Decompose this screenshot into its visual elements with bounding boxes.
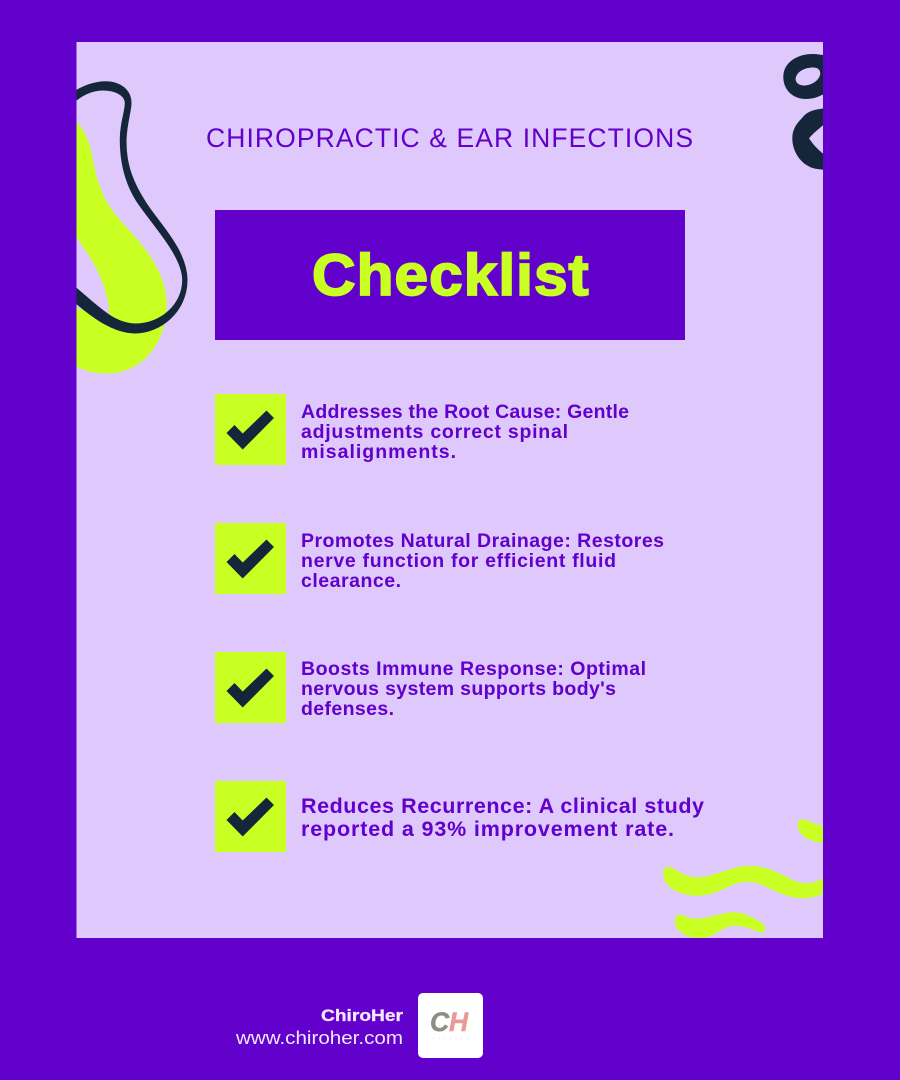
checklist item 2: clearance. — [301, 570, 401, 592]
checklist item 2: nerve function for efficient fluid — [301, 550, 616, 572]
checklist item 4: Reduces Recurrence: A clinical study — [301, 794, 704, 818]
logo: ....... — [433, 1034, 468, 1040]
logo: H — [449, 1007, 469, 1037]
checklist item 3: nervous system supports body's — [301, 678, 616, 700]
icon: check box — [215, 394, 286, 465]
checklist item 4: reported a 93% improvement rate. — [301, 817, 674, 841]
checklist item 3 — [215, 652, 646, 723]
decoration: dark rings top right — [783, 54, 823, 170]
checklist item 3: Boosts Immune Response: Optimal — [301, 658, 646, 680]
logo — [418, 993, 483, 1058]
checklist item 1 — [215, 394, 629, 465]
checklist item 4 — [215, 781, 704, 852]
panel: checklist card — [76, 42, 823, 938]
icon: check box — [215, 652, 286, 723]
checklist item 1: adjustments correct spinal — [301, 421, 568, 443]
checklist item 2 — [215, 523, 664, 594]
icon: check box — [215, 523, 286, 594]
title banner: Checklist — [312, 242, 589, 308]
checklist item 1: misalignments. — [301, 441, 456, 463]
icon: check box — [215, 781, 286, 852]
footer brand text: ChiroHer — [321, 1006, 403, 1025]
footer brand text — [235, 1006, 403, 1048]
footer brand text: www.chiroher.com — [235, 1027, 403, 1048]
checklist item 3: defenses. — [301, 698, 394, 720]
checklist item 2: Promotes Natural Drainage: Restores — [301, 530, 664, 552]
subtitle heading: CHIROPRACTIC & EAR INFECTIONS — [206, 123, 693, 153]
decoration: lime waves bottom right — [664, 820, 835, 938]
logo: C — [430, 1007, 450, 1037]
title banner — [215, 210, 685, 340]
decoration: lime blob and dark outline — [70, 82, 187, 373]
checklist item 1: Addresses the Root Cause: Gentle — [301, 401, 629, 423]
